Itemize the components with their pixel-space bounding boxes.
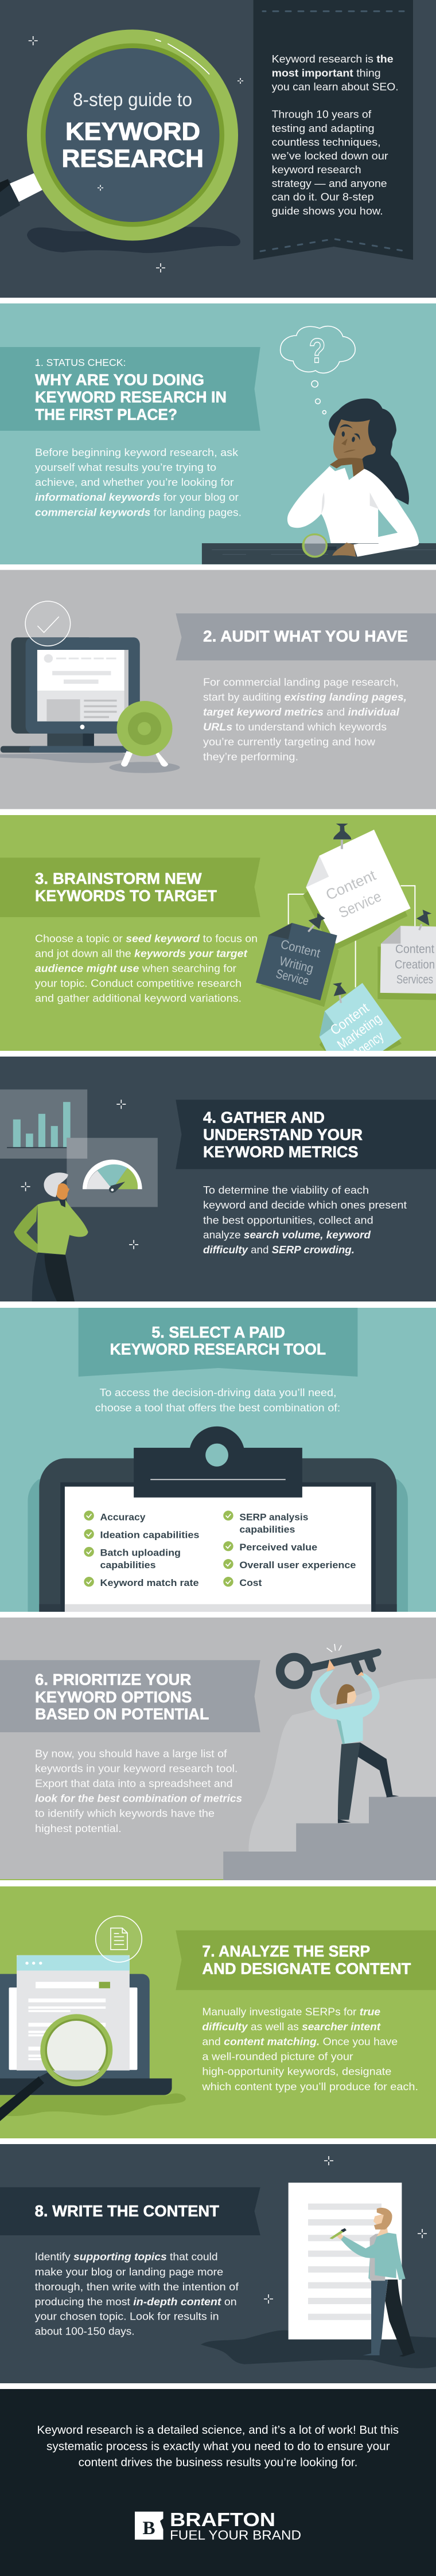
- checklist right: Overall user experience: [239, 1560, 356, 1570]
- checklist right: Perceived value: [239, 1542, 317, 1553]
- body text: look for the best combination of metrics: [35, 1792, 242, 1804]
- body text: start by auditing existing landing pages,: [203, 691, 407, 703]
- body text: Choose a topic or seed keyword to focus on: [35, 933, 258, 944]
- icon: checks: [223, 1511, 233, 1587]
- body text: [35, 933, 258, 1004]
- illustration: woman lifting key: [276, 1644, 399, 1823]
- illustration: dashboards and person: [0, 1089, 158, 1301]
- panel: step 1 status check: [0, 303, 436, 564]
- icon: target: [117, 701, 173, 767]
- heading: 4. GATHER AND: [203, 1108, 325, 1126]
- intro text: we’ve locked down our: [271, 150, 388, 162]
- logo: B: [142, 2518, 155, 2539]
- panel: step 6 prioritize: [0, 1618, 436, 1880]
- body text: [201, 2005, 418, 2092]
- body text: and jot down all the keywords your target: [35, 948, 248, 959]
- heading: [202, 1942, 411, 1977]
- body text: a well-rounded picture of your: [202, 2050, 353, 2063]
- checklist left: capabilities: [100, 1560, 156, 1570]
- icon: checks: [84, 1511, 94, 1587]
- body text: difficulty and SERP crowding.: [203, 1244, 355, 1256]
- logo: [135, 2509, 301, 2543]
- body text: analyze search volume, keyword: [203, 1229, 371, 1241]
- icon: magnifying glass: [0, 2014, 112, 2125]
- body text: [35, 446, 242, 519]
- heading: UNDERSTAND YOUR: [203, 1125, 363, 1143]
- icon: document circle: [96, 1916, 142, 1962]
- label: [327, 871, 381, 917]
- label: Marketing: [334, 1011, 384, 1053]
- intro text: you can learn about SEO.: [272, 80, 399, 93]
- body text: audience might use when searching for: [35, 962, 236, 974]
- body text: which content type you’ll produce for each.: [201, 2080, 418, 2092]
- body text: Export that data into a spreadsheet and: [35, 1778, 233, 1790]
- label: Content: [323, 866, 379, 903]
- closing text: systematic process is exactly what you need to do to ensure your: [46, 2439, 390, 2453]
- checklist left: [84, 1511, 200, 1588]
- body text: achieve, and whether you’re looking for: [35, 476, 234, 488]
- panel: step 7 analyze: [0, 1887, 436, 2138]
- body text: [35, 2250, 239, 2337]
- body text: To determine the viability of each: [203, 1184, 369, 1196]
- heading: KEYWORD RESEARCH IN: [35, 388, 227, 406]
- heading: KEYWORD METRICS: [203, 1143, 358, 1161]
- note: content creation services: [377, 910, 436, 1000]
- closing text: Keyword research is a detailed science, and it’s a lot of work! But this: [37, 2423, 399, 2437]
- panel: step 4 metrics: [0, 1057, 436, 1301]
- body text: keyword and decide which ones present: [203, 1199, 407, 1211]
- body text: and gather additional keyword variations.: [35, 992, 242, 1004]
- illustration: woman blouse and table: [202, 466, 436, 564]
- writer: [329, 2208, 415, 2356]
- icon: check circle: [25, 601, 71, 646]
- connector lines: [289, 886, 415, 987]
- label: Service: [275, 967, 310, 988]
- illustration: pinned notes: [256, 824, 436, 1061]
- note: content writing service: [256, 913, 339, 1007]
- body text: your chosen topic. Look for results in: [35, 2310, 219, 2322]
- body text: highest potential.: [35, 1822, 122, 1834]
- heading: THE FIRST PLACE?: [35, 406, 177, 423]
- intro text: keyword research: [272, 163, 361, 176]
- note: content marketing agency: [320, 983, 402, 1057]
- checklist right: SERP analysis: [239, 1512, 308, 1522]
- heading: 8. WRITE THE CONTENT: [35, 2202, 219, 2220]
- label: [277, 940, 320, 985]
- illustration: monitor and target: [0, 601, 180, 773]
- label: Agency: [349, 1028, 387, 1061]
- illustration: woman hair and head: [329, 399, 409, 505]
- heading band: [0, 2187, 260, 2235]
- title: RESEARCH: [62, 145, 204, 173]
- body text: Identify supporting topics that could: [35, 2250, 218, 2262]
- logo: FUEL YOUR BRAND: [170, 2528, 301, 2543]
- heading: WHY ARE YOU DOING: [35, 371, 204, 389]
- intro text: can do it. Our 8-step: [272, 191, 374, 203]
- intro text: testing and adapting: [272, 122, 375, 134]
- panel: intro ribbon: [254, 0, 413, 260]
- intro text: most important thing: [272, 67, 381, 79]
- illustration: clipboard: [28, 1427, 408, 1612]
- checklist right: Cost: [239, 1577, 262, 1588]
- intro text: Keyword research is the: [272, 53, 394, 65]
- heading: BASED ON POTENTIAL: [35, 1705, 209, 1723]
- heading: 3. BRAINSTORM NEW: [35, 870, 202, 887]
- heading: [35, 1670, 209, 1723]
- heading: AND DESIGNATE CONTENT: [202, 1959, 411, 1977]
- checklist left: Accuracy: [100, 1512, 146, 1522]
- body text: Before beginning keyword research, ask: [35, 446, 239, 458]
- body text: your topic. Conduct competitive research: [35, 977, 242, 989]
- icon: key: [276, 1644, 382, 1689]
- heading: 1. STATUS CHECK:: [35, 357, 126, 368]
- icon: small magnifier: [302, 533, 336, 558]
- body text: choose a tool that offers the best combination of:: [95, 1402, 340, 1414]
- checklist left: Batch uploading: [100, 1548, 181, 1558]
- heading band: [0, 858, 260, 917]
- heading band: [176, 1100, 436, 1169]
- page: [289, 2183, 402, 2340]
- heading: KEYWORD RESEARCH TOOL: [110, 1340, 326, 1358]
- browser window: [17, 1955, 130, 2071]
- closing text: [37, 2423, 399, 2469]
- body text: to identify which keywords have the: [35, 1807, 215, 1819]
- checklist right: capabilities: [239, 1524, 295, 1535]
- background hill: [248, 1678, 436, 1880]
- heading: KEYWORDS TO TARGET: [35, 887, 217, 905]
- icon: magnifying glass handle: [0, 173, 42, 217]
- chart panel: [0, 1089, 87, 1159]
- body text: thorough, then write with the intention of: [35, 2281, 239, 2293]
- icon: magnifying glass: [27, 30, 238, 241]
- body text: Manually investigate SERPs for true: [202, 2005, 380, 2017]
- body text: target keyword metrics and individual: [203, 706, 400, 718]
- body text: [95, 1386, 340, 1414]
- body text: producing the most in-depth content on: [35, 2296, 237, 2308]
- body text: yourself what results you’re trying to: [35, 461, 216, 473]
- heading band: [176, 1930, 436, 1990]
- heading band: [0, 1660, 260, 1732]
- title: [62, 89, 204, 173]
- sparkles: [264, 2156, 427, 2304]
- panel: step 5 tool: [0, 1308, 436, 1612]
- note: content service: [303, 824, 411, 952]
- heading band: [0, 347, 260, 431]
- heading ribbon: [79, 1308, 357, 1377]
- closing text: content drives the business results you’re looking for.: [79, 2456, 357, 2469]
- heading: 7. ANALYZE THE SERP: [202, 1942, 370, 1960]
- panel: footer: [0, 2389, 436, 2576]
- title: 8-step guide to: [73, 89, 192, 110]
- body text: informational keywords for your blog or: [35, 491, 239, 503]
- intro text: [271, 53, 399, 217]
- illustration: page and writer: [201, 2183, 436, 2368]
- body text: For commercial landing page research,: [203, 676, 399, 688]
- body text: To access the decision-driving data you’ll need,: [100, 1386, 336, 1398]
- sparkles: [29, 36, 243, 272]
- checklist left: Keyword match rate: [100, 1577, 198, 1588]
- shadow under magnifier: [27, 227, 240, 253]
- logo: BRAFTON: [170, 2509, 275, 2531]
- label: Service: [336, 887, 384, 921]
- body text: difficulty as well as searcher intent: [202, 2020, 381, 2032]
- panel: step 2 audit: [0, 570, 436, 809]
- intro text: countless techniques,: [272, 136, 381, 148]
- panel: hero: [0, 0, 436, 298]
- checklist left: Ideation capabilities: [100, 1530, 200, 1541]
- intro text: strategy — and anyone: [272, 177, 387, 189]
- woman: [311, 1659, 399, 1823]
- icon: thought bubble: [281, 326, 355, 414]
- stairs: [223, 1797, 436, 1880]
- heading band: [176, 613, 436, 660]
- heading: 5. SELECT A PAID: [151, 1323, 285, 1341]
- label: Writing: [278, 953, 315, 976]
- heading: 2. AUDIT WHAT YOU HAVE: [203, 628, 408, 645]
- title: KEYWORD: [65, 118, 200, 146]
- label: [395, 945, 434, 983]
- body text: and content matching. Once you have: [202, 2036, 398, 2048]
- label: Content: [328, 1000, 372, 1038]
- body text: you’re currently targeting and how: [203, 735, 376, 747]
- body text: about 100-150 days.: [35, 2325, 135, 2337]
- body text: By now, you should have a large list of: [35, 1747, 227, 1759]
- body text: they’re performing.: [203, 750, 298, 762]
- body text: the best opportunities, collect and: [203, 1214, 373, 1226]
- body text: URLs to understand which keywords: [203, 720, 387, 733]
- body text: make your blog or landing page more: [35, 2266, 223, 2278]
- label: Content: [279, 937, 322, 960]
- person: [14, 1172, 88, 1301]
- body text: [203, 676, 407, 762]
- panel: step 3 brainstorm: [0, 815, 436, 1061]
- sparkles: [21, 1100, 138, 1249]
- body text: keywords in your keyword research tool.: [35, 1763, 238, 1775]
- body text: commercial keywords for landing pages.: [35, 506, 242, 519]
- illustration: laptop and browser: [0, 1916, 186, 2125]
- heading: [35, 870, 217, 905]
- intro text: guide shows you how.: [272, 205, 383, 217]
- question mark: ?: [309, 332, 326, 370]
- gauge panel: [67, 1138, 158, 1207]
- heading: [110, 1323, 326, 1358]
- body text: high-opportunity keywords, designate: [202, 2065, 391, 2077]
- intro text: Through 10 years of: [272, 108, 372, 120]
- heading: 6. PRIORITIZE YOUR: [35, 1670, 191, 1688]
- heading: [203, 1108, 363, 1161]
- heading: KEYWORD OPTIONS: [35, 1688, 192, 1706]
- panel: step 8 write: [0, 2144, 436, 2383]
- body text: [203, 1184, 407, 1256]
- checklist right: [223, 1511, 356, 1588]
- heading: [35, 357, 227, 423]
- body text: [35, 1747, 242, 1834]
